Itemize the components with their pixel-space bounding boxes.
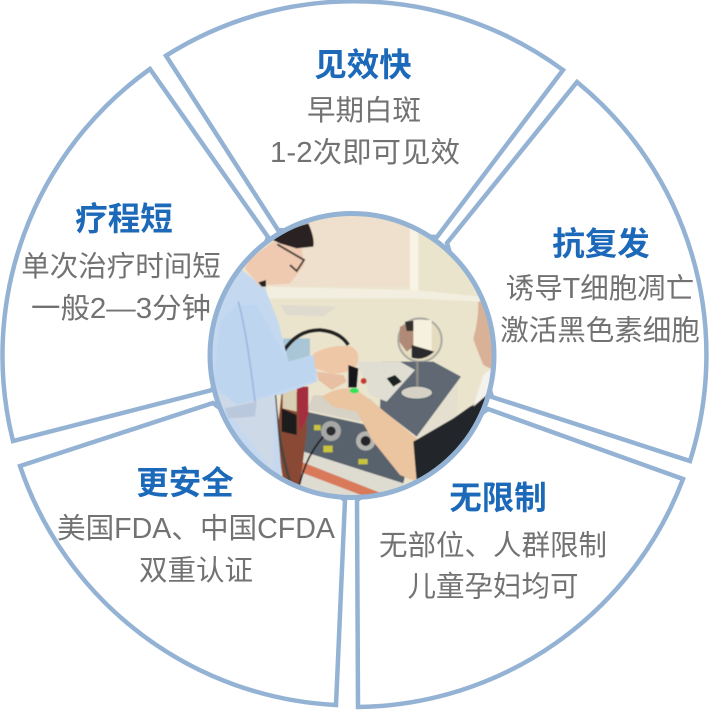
text: 早期白斑 1-2次即可见效: 1-2次即可见效 [270,137,460,169]
heading: 无限制: 无限制 [449,480,547,516]
heading: 见效快: 见效快 [314,47,412,83]
text: 美国FDA、中国CFDA 双重认证: 双重认证 [139,555,253,587]
hands [313,346,358,374]
text: 诱导T细胞凋亡 激活黑色素细胞: 诱导T细胞凋亡 [506,273,694,305]
text: 无部位、人群限制 儿童孕妇均可: 儿童孕妇均可 [407,571,579,603]
text: 单次治疗时间短 一般2—3分钟: 一般2—3分钟 [31,293,211,325]
text: 无部位、人群限制 儿童孕妇均可: 无部位、人群限制 [379,530,607,562]
panel: 无限制 [357,409,683,707]
panel: 抗复发 [447,82,706,461]
laser handpiece [348,365,358,388]
heading: 疗程短: 疗程短 [75,201,173,237]
mirror [398,318,442,362]
heading: 抗复发: 抗复发 [552,226,650,262]
patient arm [322,388,417,482]
text: 单次治疗时间短 一般2—3分钟 [21,251,221,325]
patient body and head [473,301,492,369]
central photo: doctor treating patient with laser machine [200,205,500,505]
text: 早期白斑 1-2次即可见效: 早期白斑 [307,95,421,127]
machine top and body [380,362,461,437]
text: 诱导T细胞凋亡 激活黑色素细胞: 激活黑色素细胞 [500,315,700,347]
heading: 更安全: 更安全 [136,465,234,501]
text: 早期白斑 1-2次即可见效 [270,95,460,169]
doctor neck and face [245,242,304,287]
panel: 见效快 [166,1,563,237]
text: 美国FDA、中国CFDA 双重认证 [57,513,335,587]
text: 美国FDA、中国CFDA 双重认证: 美国FDA、中国CFDA [57,513,335,545]
text: 无部位、人群限制 儿童孕妇均可 [379,530,607,603]
wall [263,240,473,484]
panel: 疗程短 [2,69,268,441]
text: 单次治疗时间短 一般2—3分钟: 单次治疗时间短 [21,251,221,283]
panel: 更安全 [20,403,345,705]
text: 诱导T细胞凋亡 激活黑色素细胞 [500,273,700,347]
doctor coat [203,270,317,475]
floor and dark area [277,392,307,485]
cable [283,330,348,352]
